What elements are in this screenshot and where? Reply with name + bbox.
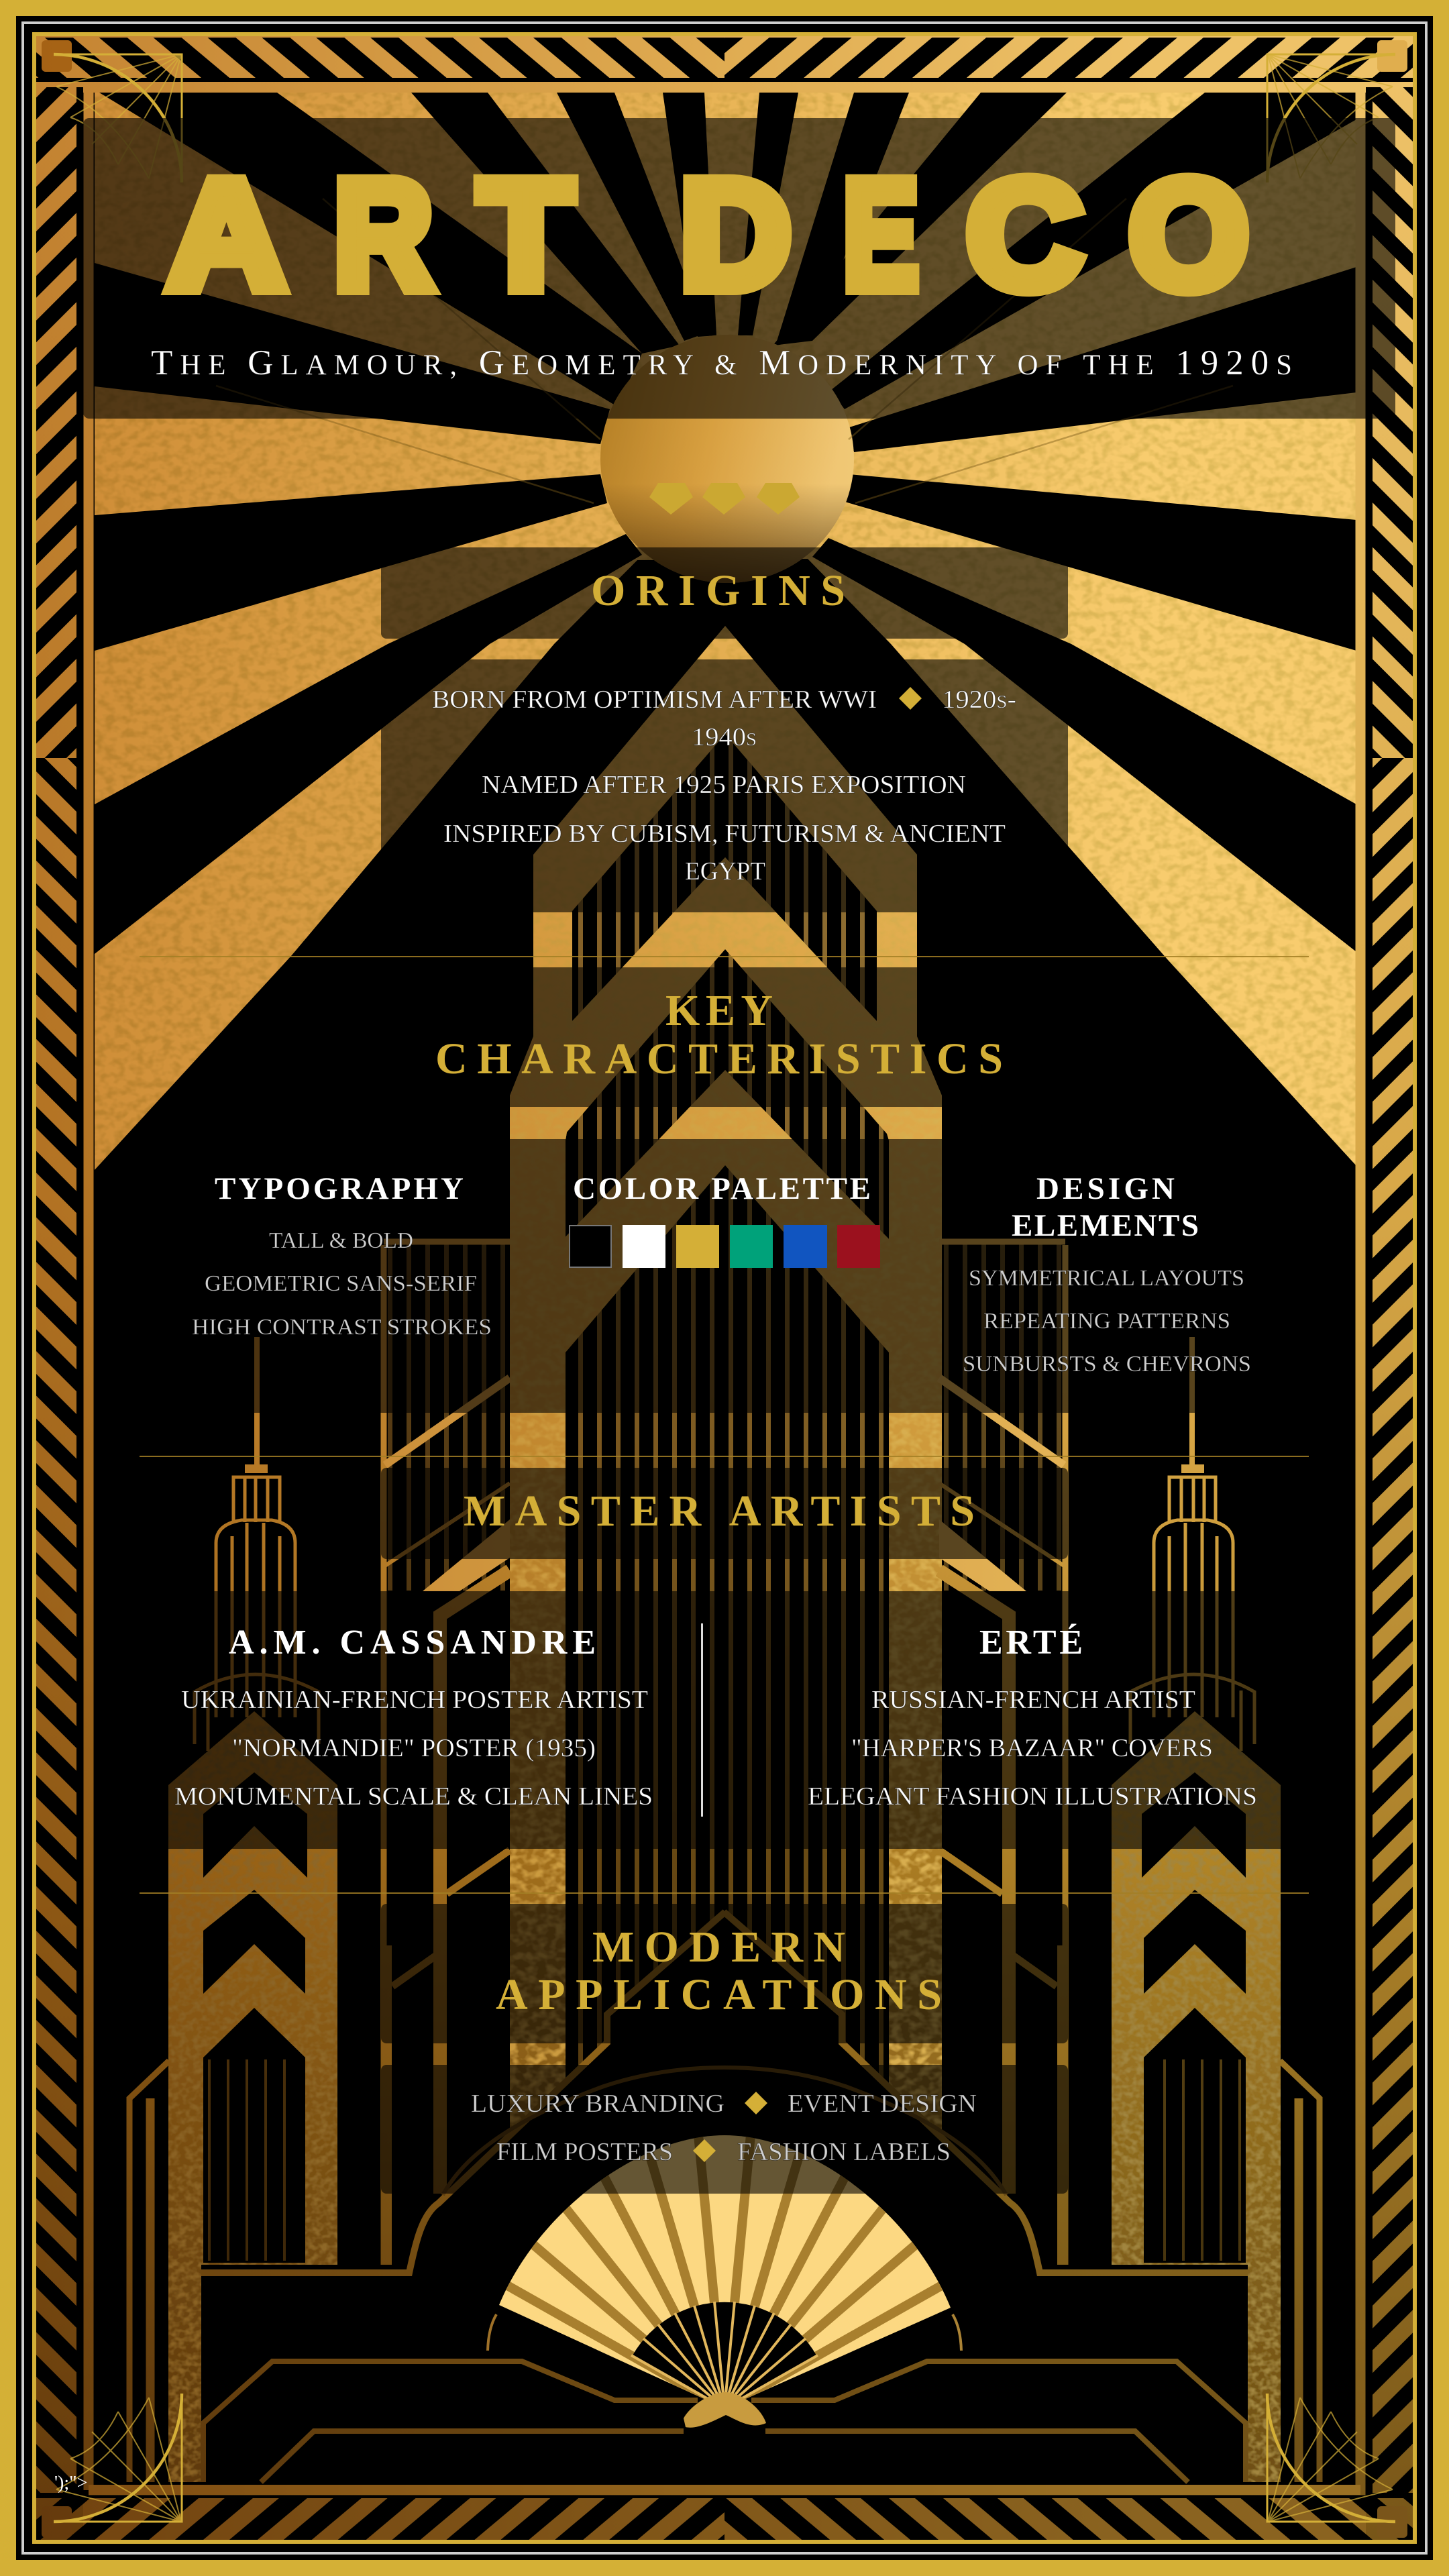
column: color palette: COLOR PALETTE xyxy=(573,1171,871,1206)
column: color palette xyxy=(570,1171,880,1268)
corner ornament: bottom right xyxy=(1267,2394,1395,2522)
artist: Erté xyxy=(808,1623,1257,1811)
column: design elements: ELEMENTS xyxy=(1012,1208,1199,1243)
divider between artists xyxy=(701,1623,703,1817)
panel: title backdrop xyxy=(83,118,1395,419)
title: C xyxy=(967,148,1083,321)
column: design elements: DESIGN xyxy=(1036,1171,1175,1206)
column: typography: HIGH CONTRAST STROKES xyxy=(192,1315,492,1340)
modern applications list: FILM POSTERS xyxy=(496,2138,673,2166)
title: D xyxy=(680,148,791,321)
artist: Erté: RUSSIAN-FRENCH ARTIST xyxy=(871,1686,1195,1714)
panel: modern applications content backdrop xyxy=(381,2065,1068,2194)
heading: key characteristics: CHARACTERISTICS xyxy=(435,1034,1003,1083)
heading: modern applications xyxy=(496,1923,942,2019)
right skyscraper and base lines xyxy=(724,1242,1320,2482)
panel: master artists heading backdrop xyxy=(381,1468,1068,1559)
sun diamonds xyxy=(649,483,800,515)
column: design elements xyxy=(963,1171,1251,1377)
modern applications list: LUXURY BRANDING xyxy=(471,2090,724,2118)
heading: modern applications: MODERN xyxy=(592,1923,845,1972)
title: R xyxy=(334,148,433,321)
column: design elements: SUNBURSTS & CHEVRONS xyxy=(963,1352,1251,1377)
central tower xyxy=(409,626,1040,2273)
modern applications list: FASHION LABELS xyxy=(737,2138,951,2166)
origins text: NAMED AFTER 1925 PARIS EXPOSITION xyxy=(482,771,966,799)
heading: origins: ORIGINS xyxy=(591,566,845,615)
artist: Erté: "HARPER'S BAZAAR" COVERS xyxy=(851,1734,1213,1762)
artist: Cassandre xyxy=(174,1623,653,1811)
panel: artists backdrop xyxy=(140,1591,1309,1849)
corner ornament: bottom left xyxy=(54,2394,182,2522)
artist: Cassandre: MONUMENTAL SCALE & CLEAN LINES xyxy=(174,1782,653,1811)
sun disc xyxy=(600,335,854,583)
column: typography: GEOMETRIC SANS-SERIF xyxy=(205,1271,477,1296)
corner ornament: top left xyxy=(54,54,182,182)
column: design elements: SYMMETRICAL LAYOUTS xyxy=(969,1266,1244,1291)
corner ornament: top right xyxy=(1267,54,1395,182)
artist: Erté: ELEGANT FASHION ILLUSTRATIONS xyxy=(808,1782,1257,1811)
title: T xyxy=(479,148,573,321)
column: typography: TYPOGRAPHY xyxy=(215,1171,464,1206)
title: E xyxy=(843,148,918,321)
column: typography xyxy=(192,1171,492,1340)
panel: origins content backdrop xyxy=(381,659,1068,912)
origins text: EGYPT xyxy=(685,857,765,885)
gold fan xyxy=(499,2135,951,2428)
artist: Cassandre: A.M. CASSANDRE xyxy=(229,1623,596,1662)
subtitle: T HE G LAMOUR, G EOMETRY & M ODERNITY OF THE 1920 S xyxy=(151,343,1292,382)
stray code fragment text: ');"> xyxy=(54,2473,87,2493)
panel: origins heading backdrop xyxy=(381,547,1068,639)
origins text: 1940s xyxy=(692,723,757,751)
panel: characteristics columns backdrop xyxy=(140,1139,1309,1413)
gold sunburst field xyxy=(95,93,1356,1193)
artist: Cassandre: "NORMANDIE" POSTER (1935) xyxy=(232,1734,596,1762)
title: A xyxy=(168,148,285,321)
heading: key characteristics: KEY xyxy=(665,986,773,1035)
panel: key characteristics heading backdrop xyxy=(381,967,1068,1107)
heading: master artists: MASTER ARTISTS xyxy=(464,1487,975,1536)
origins text: 1920s- xyxy=(942,686,1016,714)
origins text xyxy=(432,686,1016,885)
artist: Cassandre: UKRAINIAN-FRENCH POSTER ARTIST xyxy=(181,1686,648,1714)
heading: modern applications: APPLICATIONS xyxy=(496,1970,942,2019)
origins text: BORN FROM OPTIMISM AFTER WWI xyxy=(432,686,877,714)
modern applications list: EVENT DESIGN xyxy=(788,2090,977,2118)
faint radial lines xyxy=(216,199,1233,503)
title: O xyxy=(1129,148,1248,321)
left skyscraper and base lines xyxy=(129,1242,725,2482)
heading: key characteristics xyxy=(435,986,1003,1083)
panel: modern applications heading backdrop xyxy=(381,1904,1068,2043)
column: design elements: REPEATING PATTERNS xyxy=(983,1309,1230,1334)
modern applications list xyxy=(471,2090,977,2166)
column: typography: TALL & BOLD xyxy=(269,1228,413,1253)
artist: Erté: ERTÉ xyxy=(979,1623,1083,1662)
origins text: INSPIRED BY CUBISM, FUTURISM & ANCIENT xyxy=(443,820,1006,848)
